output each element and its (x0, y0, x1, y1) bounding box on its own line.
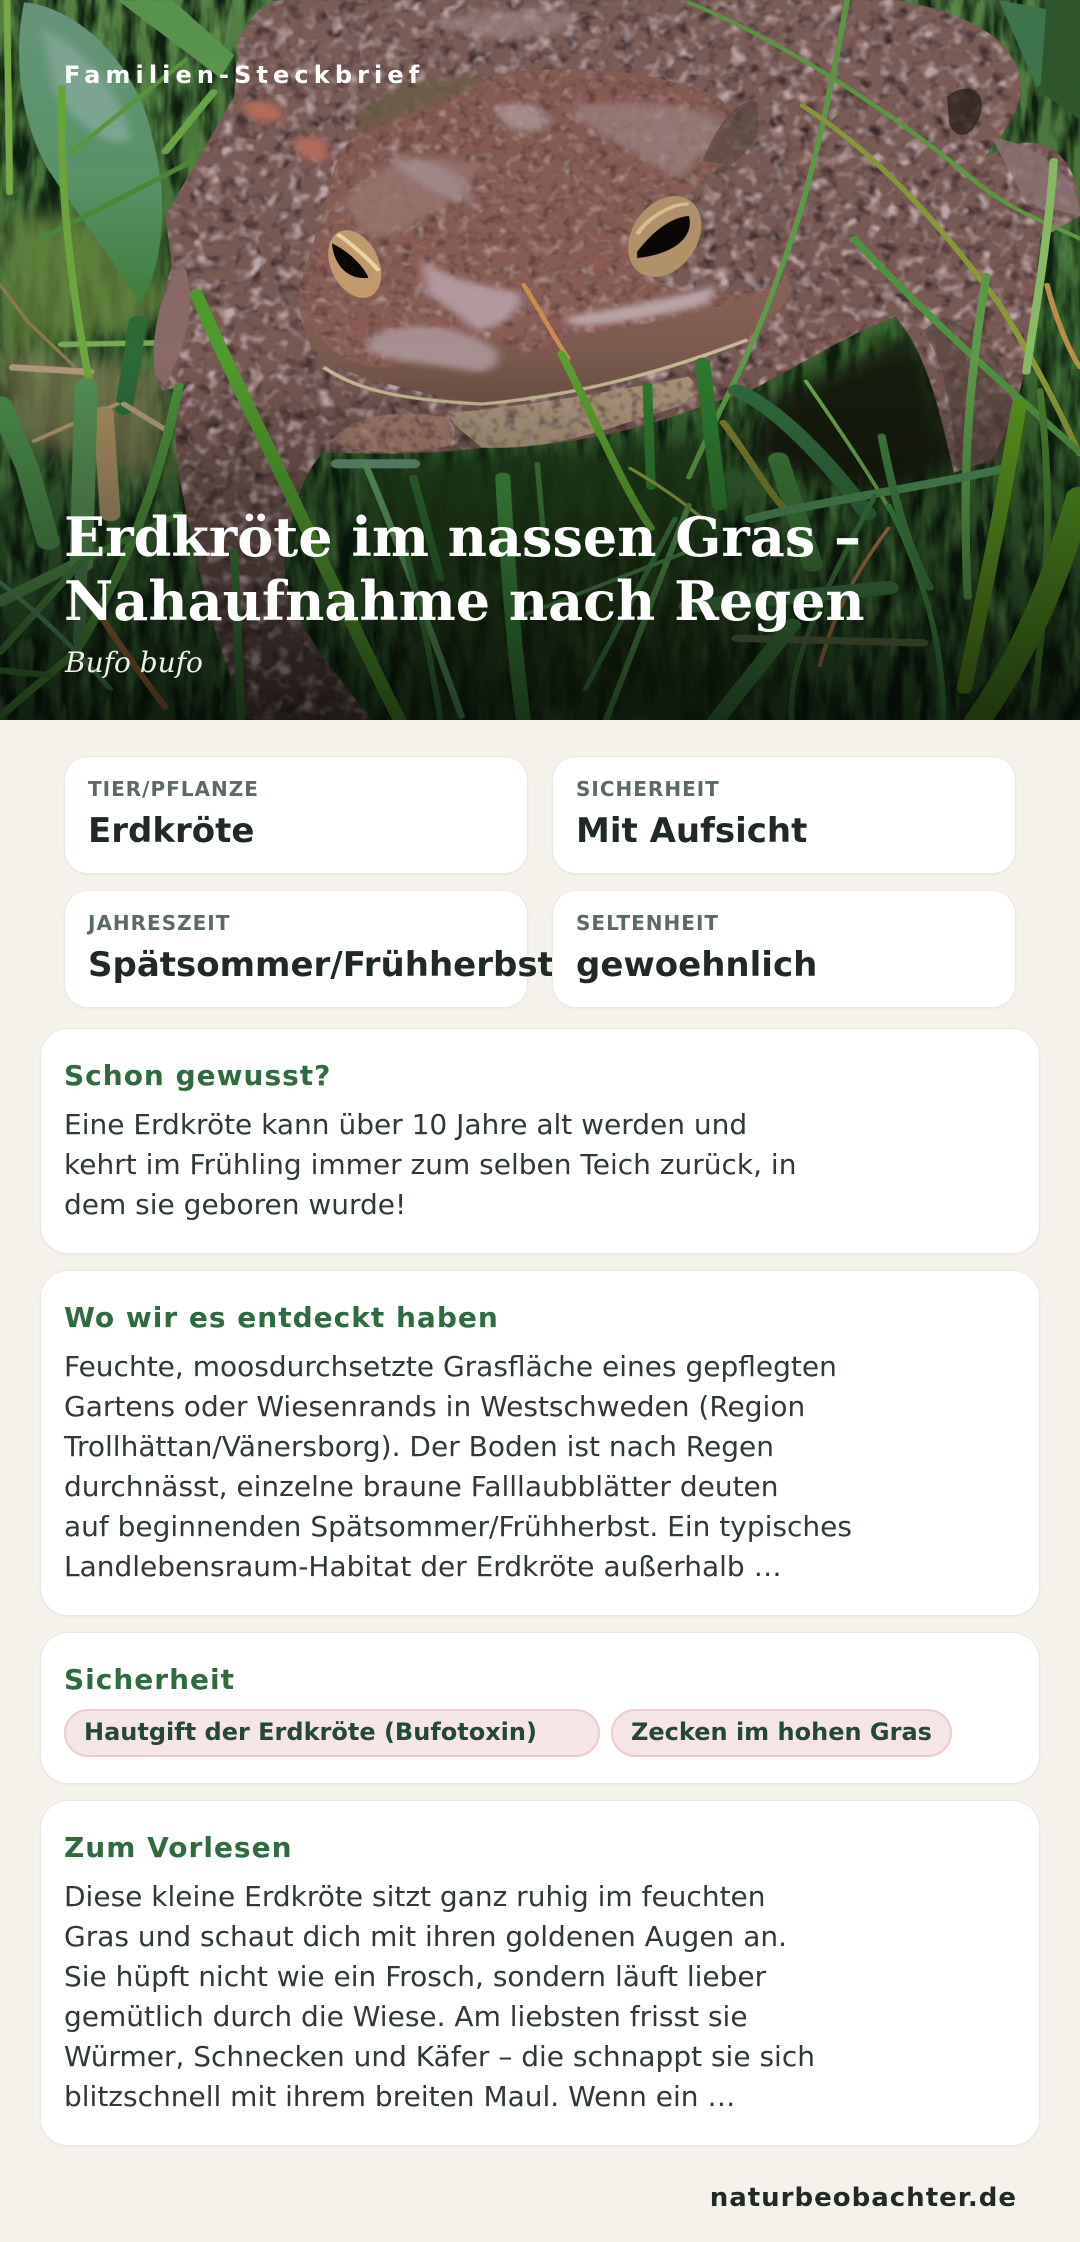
dark scrim gradient (0, 0, 1080, 720)
panel: Schon gewusst: kehrt im Frühling immer zum selben Teich zurück, in (64, 1148, 796, 1181)
stat card: Tier/Pflanze: TIER/PFLANZE (88, 777, 259, 801)
panel: Wo wir es entdeckt haben: Landlebensraum-Habitat der Erdkröte außerhalb … (64, 1550, 782, 1583)
chip: Hautgift: Hautgift der Erdkröte (Bufotoxin) (84, 1718, 537, 1746)
jaw band (303, 280, 787, 404)
dark ear patch (703, 101, 759, 165)
panel: Wo wir es entdeckt haben: Feuchte, moosdurchsetzte Grasfläche eines gepflegten (64, 1350, 837, 1383)
panel: Zum Vorlesen: Sie hüpft nicht wie ein Frosch, sondern läuft lieber (64, 1960, 766, 1993)
front grass blades (0, 0, 1080, 720)
panel: Zum Vorlesen: gemütlich durch die Wiese. Am liebsten frisst sie (64, 2000, 748, 2033)
panel: Sicherheit: Sicherheit (64, 1663, 235, 1696)
panel: Schon gewusst: Eine Erdkröte kann über 10 Jahre alt werden und (64, 1108, 747, 1141)
lip line (324, 340, 747, 404)
stat card: Jahreszeit (64, 890, 528, 1008)
panel: Wo wir es entdeckt haben: durchnässt, einzelne braune Falllaubblätter deuten (64, 1470, 779, 1503)
belly (331, 377, 695, 452)
chip: Zecken: Zecken im hohen Gras (631, 1718, 932, 1746)
title (64, 504, 865, 633)
stat card: Seltenheit (552, 890, 1016, 1008)
panel: Zum Vorlesen: Diese kleine Erdkröte sitzt ganz ruhig im feuchten (64, 1880, 766, 1913)
illustration: toad in wet grass (0, 0, 1080, 720)
toad lower right leg (923, 317, 1015, 468)
left eye (320, 227, 390, 301)
panel: Zum Vorlesen (40, 1800, 1040, 2146)
toad shoulder dark spot (947, 89, 982, 135)
stat card: Jahreszeit: JAHRESZEIT (88, 911, 230, 935)
panel: Wo wir es entdeckt haben: Gartens oder Wiesenrands in Westschweden (Region (64, 1390, 805, 1423)
title: Nahaufnahme nach Regen (64, 569, 865, 633)
stat card: Tier/Pflanze (64, 756, 528, 874)
right eye (616, 191, 713, 282)
panel: Wo wir es entdeckt haben: Trollhättan/Vänersborg). Der Boden ist nach Regen (64, 1430, 774, 1463)
back grass blades (0, 0, 813, 602)
background leaf (19, 0, 1080, 303)
panel: Schon gewusst: Schon gewusst? (64, 1059, 331, 1092)
stat card: Sicherheit (552, 756, 1016, 874)
panel: Wo wir es entdeckt haben: auf beginnenden Spätsommer/Frühherbst. Ein typisches (64, 1510, 852, 1543)
eyebrow label: Familien-Steckbrief (64, 61, 424, 89)
stat card: Seltenheit: gewoehnlich (576, 945, 817, 985)
panel: Sicherheit (40, 1632, 1040, 1784)
stat card: Jahreszeit: Spätsommer/Frühherbst (88, 945, 554, 985)
title: Erdkröte im nassen Gras – (64, 504, 861, 568)
chip: Zecken (611, 1709, 952, 1757)
panel: Zum Vorlesen: blitzschnell mit ihrem breiten Maul. Wenn ein … (64, 2080, 735, 2113)
hero: toad photo with title (0, 0, 1080, 720)
panel: Schon gewusst: dem sie geboren wurde! (64, 1188, 406, 1221)
dark shadow patches (0, 197, 964, 720)
panel: Zum Vorlesen: Gras und schaut dich mit ihren goldenen Augen an. (64, 1920, 787, 1953)
panel: Zum Vorlesen: Würmer, Schnecken und Käfer – die schnappt sie sich (64, 2040, 815, 2073)
panel: Schon gewusst (40, 1028, 1040, 1254)
stat card: Sicherheit: SICHERHEIT (576, 777, 720, 801)
panel: Wo wir es entdeckt haben (40, 1270, 1040, 1616)
toad head (299, 69, 789, 404)
stat card: Tier/Pflanze: Erdkröte (88, 811, 254, 851)
chip: Hautgift (64, 1709, 600, 1757)
panel: Zum Vorlesen: Zum Vorlesen (64, 1831, 293, 1864)
panel: Wo wir es entdeckt haben: Wo wir es entdeckt haben (64, 1301, 499, 1334)
footer brand: naturbeobachter.de (710, 2183, 1017, 2213)
scientific name: Bufo bufo (65, 646, 203, 679)
wet highlights (241, 8, 723, 372)
toad body (155, 0, 1080, 720)
stat card: Seltenheit: SELTENHEIT (576, 911, 719, 935)
stat card: Sicherheit: Mit Aufsicht (576, 811, 807, 851)
